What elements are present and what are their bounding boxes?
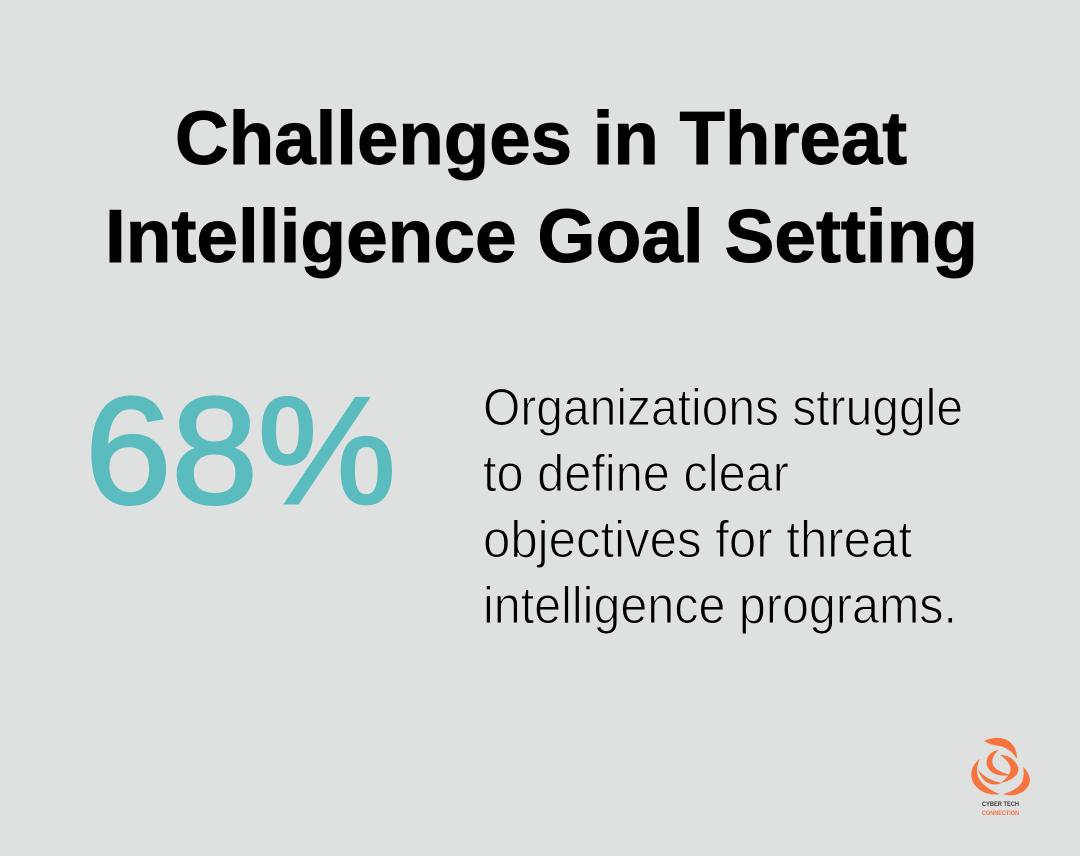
- logo wordmark: Connection: CONNECTION: [982, 810, 1019, 817]
- title: Challenges in Threat: [175, 96, 907, 180]
- statistic: 68%: 68%: [85, 366, 396, 536]
- title: Intelligence Goal Setting: [105, 194, 978, 278]
- description text: intelligence programs.: [483, 577, 957, 635]
- logo: Cyber Tech Connection: [971, 738, 1030, 817]
- description text: objectives for threat: [483, 511, 913, 569]
- description text: [483, 379, 963, 635]
- description text: to define clear: [483, 445, 789, 503]
- logo wordmark: Cyber Tech: CYBER TECH: [982, 801, 1019, 808]
- title: [105, 96, 978, 278]
- icon: orange swirl: [971, 738, 1030, 795]
- description text: Organizations struggle: [483, 379, 963, 437]
